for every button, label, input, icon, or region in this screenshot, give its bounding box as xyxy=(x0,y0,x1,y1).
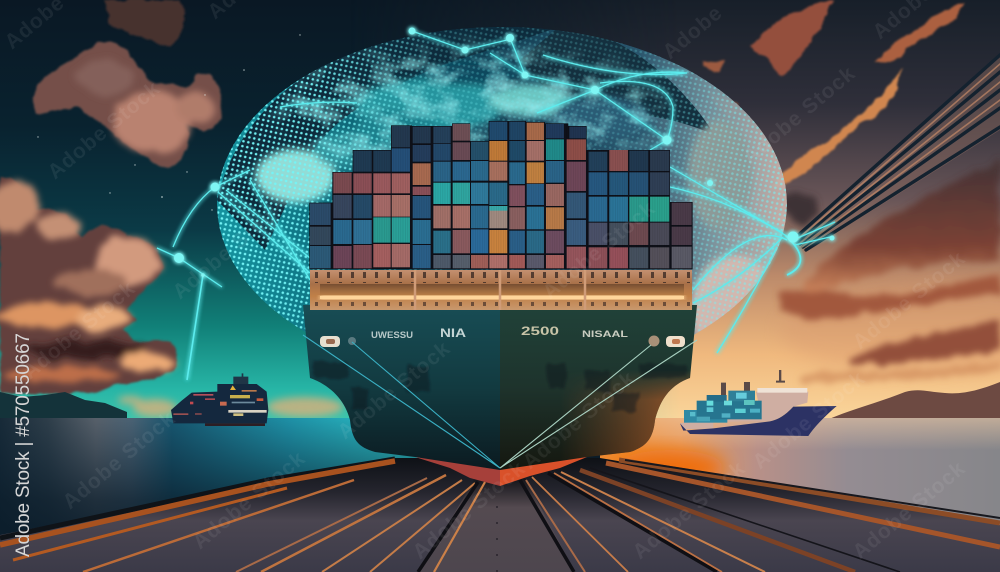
watermark text: Adobe Stock xyxy=(188,447,310,554)
watermark text: Adobe Stock xyxy=(628,457,750,564)
container stack xyxy=(309,121,693,269)
globe dark upper right ocean xyxy=(520,26,715,135)
watermark text: Adobe Stock xyxy=(848,247,970,354)
gantry glowing light strip xyxy=(320,296,684,299)
cloud: dim top-left xyxy=(103,0,184,45)
corrugation overlay xyxy=(309,121,693,269)
hull port side xyxy=(303,305,500,470)
watermark text: Adobe xyxy=(658,1,727,64)
globe base xyxy=(217,30,787,334)
horizon clouds left xyxy=(118,396,343,417)
wharf deck xyxy=(0,458,1000,572)
globe clouds and oceans xyxy=(249,63,766,334)
watermark text: Adobe Stock xyxy=(58,407,180,514)
network nodes xyxy=(174,28,834,277)
ship lights xyxy=(173,385,267,416)
watermark text: Adobe Stock xyxy=(168,197,290,304)
sea right xyxy=(600,418,1000,538)
network lines xyxy=(157,31,835,380)
rails right xyxy=(520,460,1000,572)
hull lights xyxy=(320,336,685,347)
ship funnels and mast xyxy=(721,370,785,400)
globe dot mesh xyxy=(217,27,787,334)
globe xyxy=(217,27,787,334)
stars xyxy=(37,34,301,211)
watermark text: Adobe Stock xyxy=(43,77,165,184)
hull starboard side xyxy=(500,305,697,470)
cable bundle to the right xyxy=(795,55,1000,250)
watermark text: Adobe Stock xyxy=(748,367,870,474)
globe cloud texture xyxy=(270,36,667,160)
cloud body xyxy=(34,42,222,170)
gantry dividers xyxy=(415,270,585,310)
clouds: orange streaks upper right xyxy=(703,0,965,188)
sky: sunset side xyxy=(493,0,1000,418)
ship hull xyxy=(171,384,268,423)
ship hull xyxy=(303,305,697,486)
globe dark upper shell xyxy=(217,26,560,250)
hull name left: UWESSU xyxy=(371,330,413,341)
gantry body xyxy=(310,270,692,310)
ship bridge xyxy=(233,373,248,384)
hull sunset reflection xyxy=(570,372,690,459)
watermark text: Adobe Stock xyxy=(408,457,530,564)
cloud highlights xyxy=(0,180,176,382)
sea left shading xyxy=(0,418,420,538)
hull number: 2500 xyxy=(521,324,559,338)
deck gantry band xyxy=(310,270,692,310)
cloud body xyxy=(0,176,178,394)
stack backing xyxy=(309,121,693,269)
watermark text: Adobe Stock xyxy=(538,197,660,304)
hull bow lines xyxy=(303,335,697,468)
hull name NIA: NIA xyxy=(440,326,466,340)
gantry ticks xyxy=(312,272,690,283)
ship keel xyxy=(205,423,265,426)
mountains left xyxy=(0,392,127,419)
sea left xyxy=(0,418,420,538)
clouds: red bands lower right xyxy=(770,158,1000,382)
stock id caption: Adobe Stock | #570550667 xyxy=(13,333,34,557)
sky: teal night side xyxy=(0,0,1000,420)
gantry recess xyxy=(320,284,684,298)
watermark text: Adobe Stock xyxy=(518,367,640,474)
ship upper deck xyxy=(757,388,807,393)
ship containers xyxy=(684,391,762,423)
centre walkway xyxy=(420,478,575,572)
cloud: large lower-left sunset xyxy=(0,176,178,394)
sky: warm sunset glow xyxy=(780,285,1000,375)
ship white superstructure xyxy=(680,392,808,429)
cloud highlights xyxy=(77,60,215,152)
cloud: upper left pink xyxy=(34,42,222,170)
left distant ship xyxy=(171,373,268,426)
gantry lower edge xyxy=(312,302,690,309)
hull machinery blocks xyxy=(315,362,686,412)
watermark text: Adobe Stock xyxy=(738,62,860,169)
mountains right xyxy=(829,382,1000,419)
watermark text: Adobe Stock xyxy=(18,277,140,384)
red bow port xyxy=(415,457,500,486)
hull name right: NISAAL xyxy=(582,329,628,340)
containers xyxy=(310,122,692,268)
rails left xyxy=(0,459,485,572)
watermark text: Adobe Stock xyxy=(333,337,455,444)
centre dash marks xyxy=(496,490,498,572)
right distant ship xyxy=(680,370,837,436)
red bow starboard xyxy=(500,457,587,486)
watermark text: Adobe Stock xyxy=(848,457,970,564)
ship navy hull xyxy=(680,406,837,436)
